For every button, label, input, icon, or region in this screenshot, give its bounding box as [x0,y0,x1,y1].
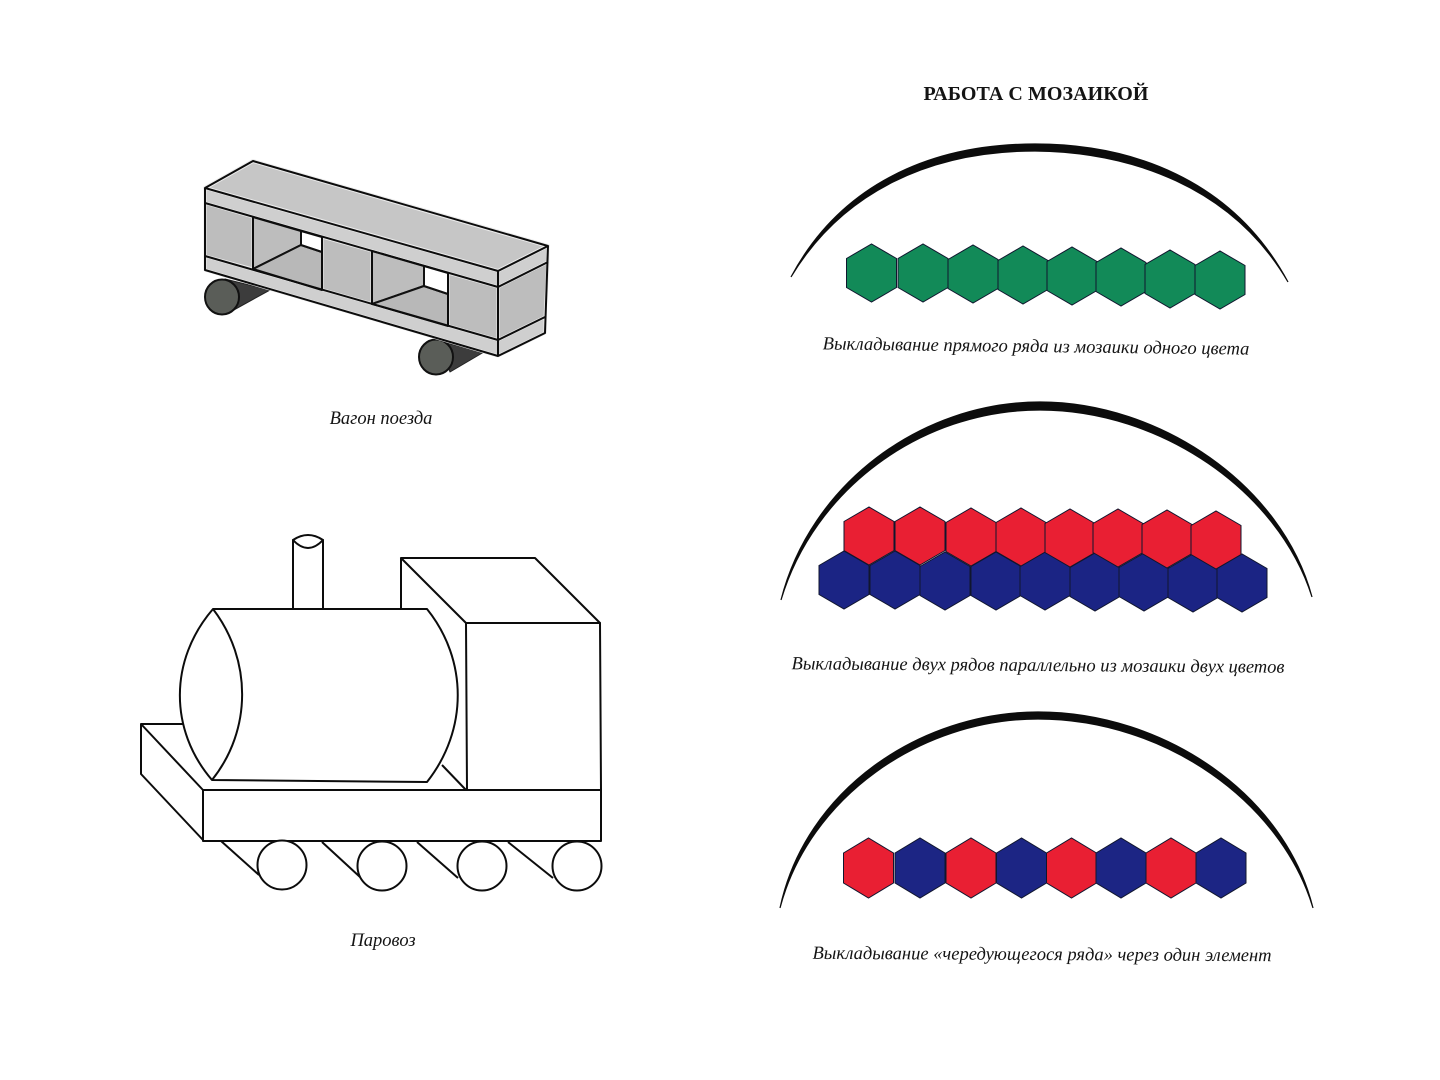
wagon outlines [205,161,548,356]
caption: row 1: Выкладывание прямого ряда из мозаики одного цвета [823,334,1250,360]
wheel: right [419,340,484,374]
wagon window right [372,251,448,326]
title: РАБОТА С МОЗАИКОЙ [924,82,1149,105]
green hexagon row [846,244,1245,309]
wheels [221,840,602,890]
caption: wagon: Вагон поезда [330,409,432,429]
chimney [293,535,323,612]
caption: row 2: Выкладывание двух рядов параллельно из мозаики двух цветов [792,654,1285,678]
boiler [180,609,458,782]
wheel: left [205,279,270,314]
locomotive illustration [141,535,602,890]
rear platform [141,724,601,841]
wagon illustration [205,161,548,374]
navy hexagon row [819,551,1267,612]
arc 1 [791,144,1288,282]
wagon window left [253,217,322,290]
wagon side panels [205,203,548,340]
red hexagon row [844,507,1241,569]
caption: row 3: Выкладывание «чередующегося ряда» через один элемент [812,944,1272,966]
caption: locomotive: Паровоз [349,931,416,951]
wagon roof [205,161,548,271]
wagon lower band [205,256,545,356]
alternating hexagon row [844,838,1246,898]
arc 3 [780,712,1313,908]
arc 2 [781,402,1312,600]
cab [401,558,601,790]
wagon upper band [205,188,548,287]
